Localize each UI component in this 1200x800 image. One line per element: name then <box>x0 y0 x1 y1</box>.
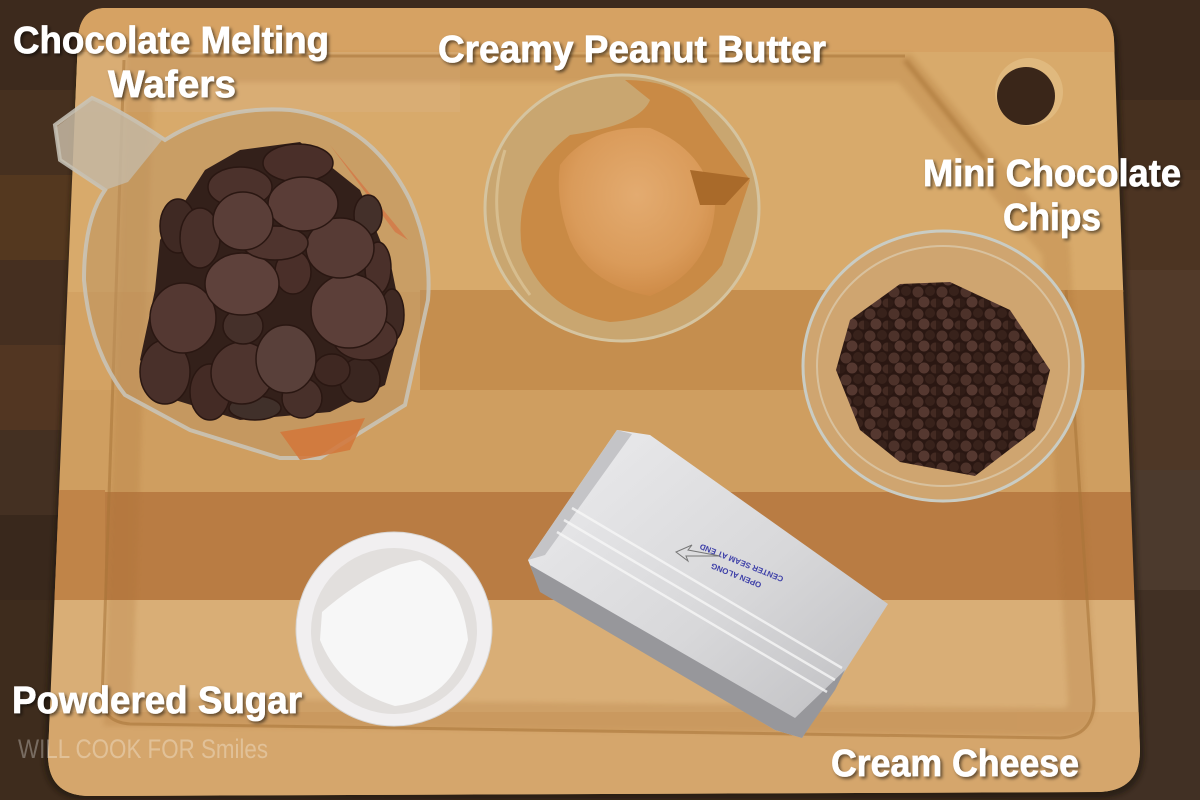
foil wrapped cream cheese <box>528 430 888 738</box>
watermark: WILL COOK FOR Smiles <box>18 734 268 764</box>
label: cream cheese: Cream Cheese <box>831 743 1079 785</box>
ramekin of powdered sugar <box>296 532 492 726</box>
board handle hole <box>995 58 1063 126</box>
label: chocolate melting wafers: Wafers <box>108 64 236 106</box>
foil printed instructions: OPEN ALONG <box>710 561 763 589</box>
bowl of mini chocolate chips <box>803 231 1083 501</box>
label: mini chocolate chips: Mini Chocolate <box>923 153 1181 195</box>
label: powdered sugar: Powdered Sugar <box>12 680 302 722</box>
label: chocolate melting wafers <box>13 20 329 106</box>
label: chocolate melting wafers: Chocolate Melting <box>13 20 329 62</box>
label: mini chocolate chips: Chips <box>1003 197 1101 239</box>
foil printed instructions <box>676 542 785 589</box>
measuring cup with chocolate wafers <box>55 98 429 460</box>
label: mini chocolate chips <box>923 153 1181 239</box>
foil printed instructions: CENTER SEAM AT END <box>698 542 785 583</box>
label: creamy peanut butter: Creamy Peanut Butter <box>438 29 826 71</box>
bowl of peanut butter <box>485 75 759 341</box>
